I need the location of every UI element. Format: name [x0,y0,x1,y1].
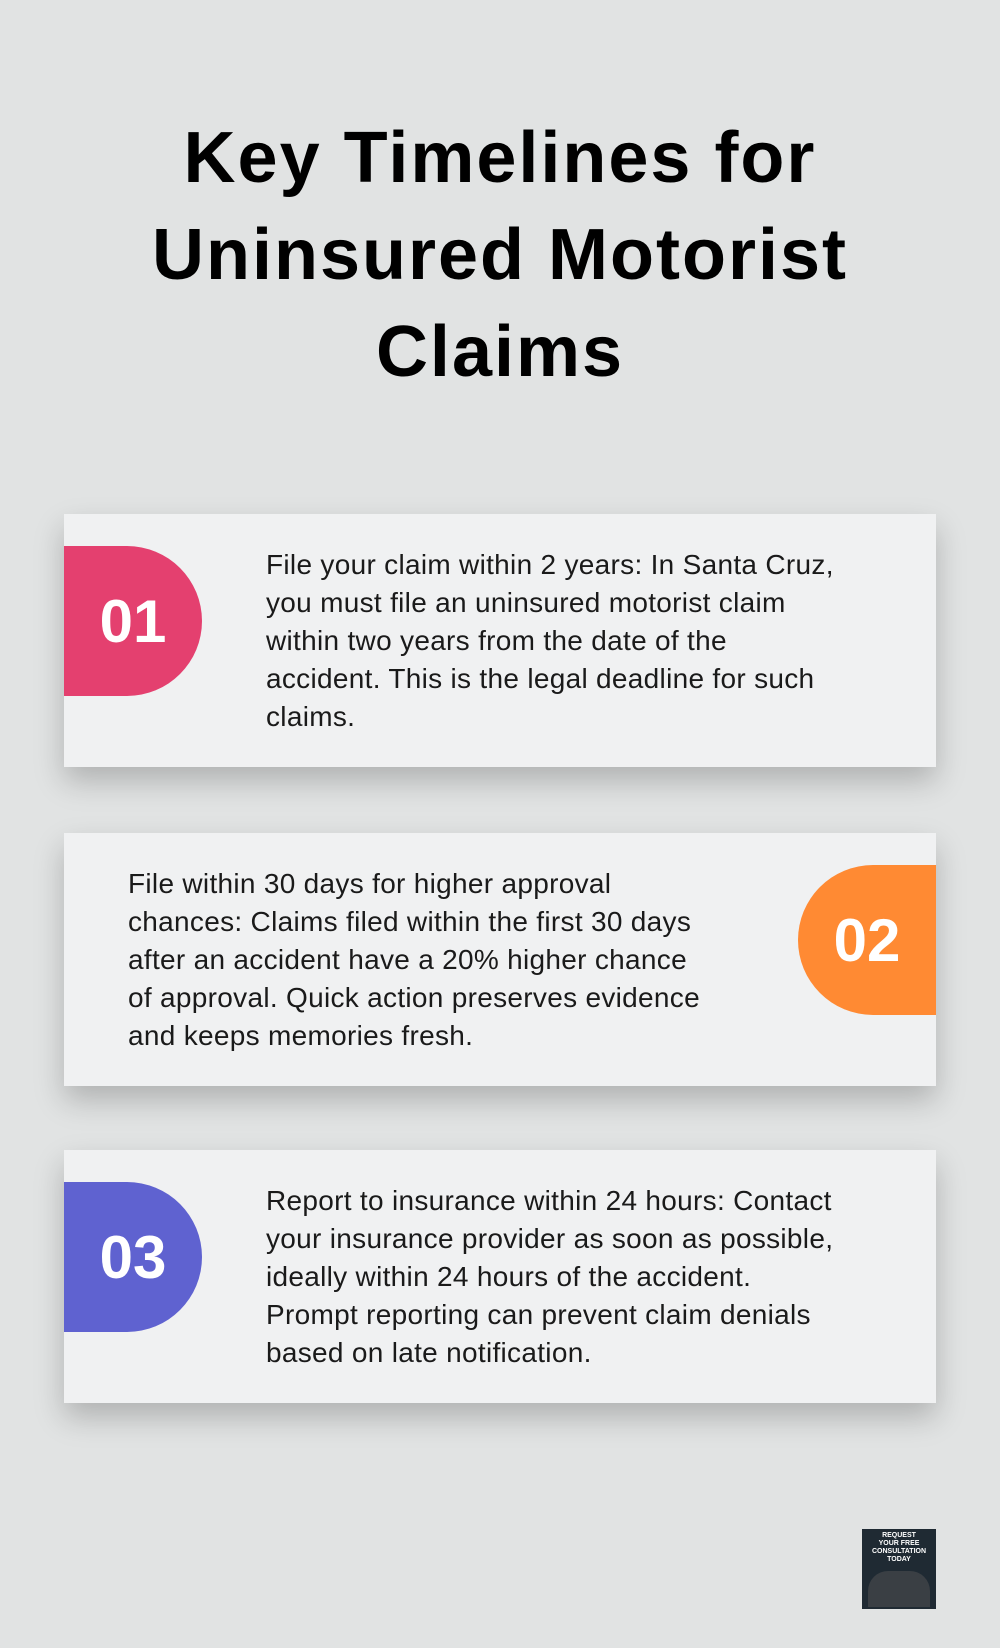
text 03: ideally within 24 hours of the accident. [266,1260,751,1292]
logo: consultation badge: YOUR FREE [879,1540,919,1547]
text 01 [266,548,834,732]
text 03: Report to insurance within 24 hours: Contact [266,1184,832,1216]
text 02: after an accident have a 20% higher chance [128,944,687,974]
badge 01 [64,546,202,696]
text 01: claims. [266,700,355,732]
text 01: you must file an uninsured motorist claim [266,586,786,618]
text 02: of approval. Quick action preserves evidence [128,982,700,1012]
panel: step 03 [64,1150,936,1403]
badge 03 [64,1182,202,1332]
text 02: and keeps memories fresh. [128,1020,473,1050]
text 03: Prompt reporting can prevent claim denials [266,1298,811,1330]
logo: consultation badge: REQUEST [882,1532,916,1539]
text 01: File your claim within 2 years: In Santa Cruz, [266,548,834,580]
text 03: your insurance provider as soon as possible, [266,1222,833,1254]
logo: consultation badge: TODAY [887,1556,911,1563]
text 02: chances: Claims filed within the first 30 days [128,906,691,936]
text 02: File within 30 days for higher approval [128,868,611,898]
logo: consultation badge: CONSULTATION [872,1548,926,1555]
panel: step 02 [64,833,936,1086]
text 01: within two years from the date of the [266,624,727,656]
text 03: based on late notification. [266,1336,592,1368]
badge 01: 01 [100,588,166,654]
text 02 [128,868,700,1051]
title [152,118,848,392]
title: Key Timelines for [184,118,816,198]
text 03 [266,1184,833,1368]
title: Claims [376,312,624,392]
badge 02 [798,865,936,1015]
logo: consultation badge [862,1529,936,1609]
badge 02: 02 [834,906,900,974]
panel: step 01 [64,514,936,767]
badge 03: 03 [100,1224,166,1290]
text 01: accident. This is the legal deadline for such [266,662,814,694]
title: Uninsured Motorist [152,215,848,295]
